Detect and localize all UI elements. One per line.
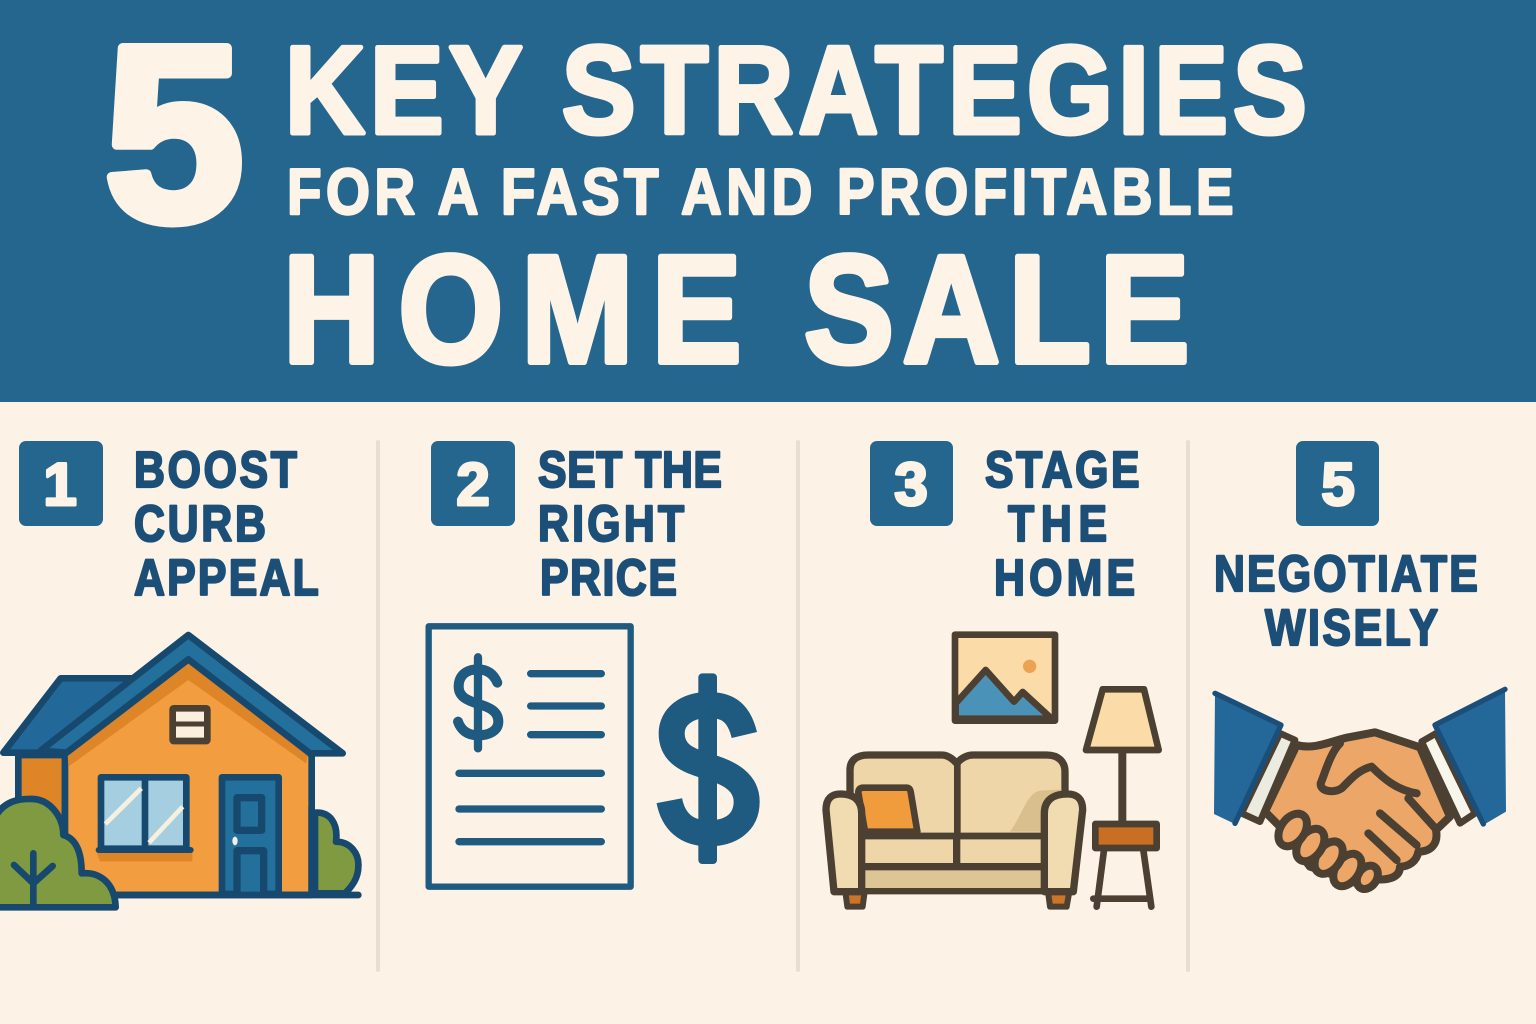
panel: stage the home	[826, 440, 1159, 907]
heading: negotiate wisely	[1214, 544, 1478, 656]
icon: price document and dollar	[429, 626, 747, 887]
icon: handshake	[1214, 688, 1506, 893]
number badge 1: 1	[43, 451, 77, 518]
heading: stage the home	[985, 440, 1140, 606]
heading: set the right price: RIGHT	[538, 494, 684, 552]
heading: set the right price: SET THE	[538, 440, 722, 498]
panel: set the right price	[429, 440, 747, 887]
title line: for a fast and profitable: FOR A FAST AND PROFITABLE	[287, 155, 1234, 228]
number badge 3	[870, 441, 953, 526]
number badge 2	[431, 441, 515, 526]
heading: boost curb appeal	[134, 440, 319, 606]
heading: negotiate wisely: WISELY	[1265, 598, 1438, 656]
panel: boost curb appeal	[0, 440, 358, 907]
title line: home sale	[283, 224, 1189, 395]
heading: boost curb appeal: APPEAL	[134, 548, 319, 606]
number badge 5: 5	[1321, 451, 1355, 518]
heading: boost curb appeal: CURB	[134, 494, 266, 552]
heading: stage the home: STAGE	[985, 440, 1140, 498]
heading: boost curb appeal: BOOST	[134, 440, 297, 498]
heading: negotiate wisely: NEGOTIATE	[1214, 544, 1478, 602]
panel: negotiate wisely	[1214, 441, 1506, 893]
title line: key strategies: KEY STRATEGIES	[285, 21, 1307, 159]
title numeral 5: 5	[104, 0, 244, 273]
number badge 1	[19, 441, 103, 526]
icon: house	[0, 635, 358, 907]
number badge 3: 3	[894, 451, 928, 518]
header banner	[0, 0, 1536, 402]
title line: home sale: SALE	[804, 224, 1189, 395]
heading: set the right price	[538, 440, 722, 606]
heading: stage the home: THE	[1008, 494, 1107, 552]
number badge 2: 2	[456, 451, 490, 518]
number badge 5	[1296, 441, 1379, 526]
heading: stage the home: HOME	[994, 548, 1135, 606]
icon: sofa, picture and lamp	[826, 635, 1159, 907]
title line: home sale: HOME	[283, 224, 741, 395]
heading: set the right price: PRICE	[540, 548, 677, 606]
